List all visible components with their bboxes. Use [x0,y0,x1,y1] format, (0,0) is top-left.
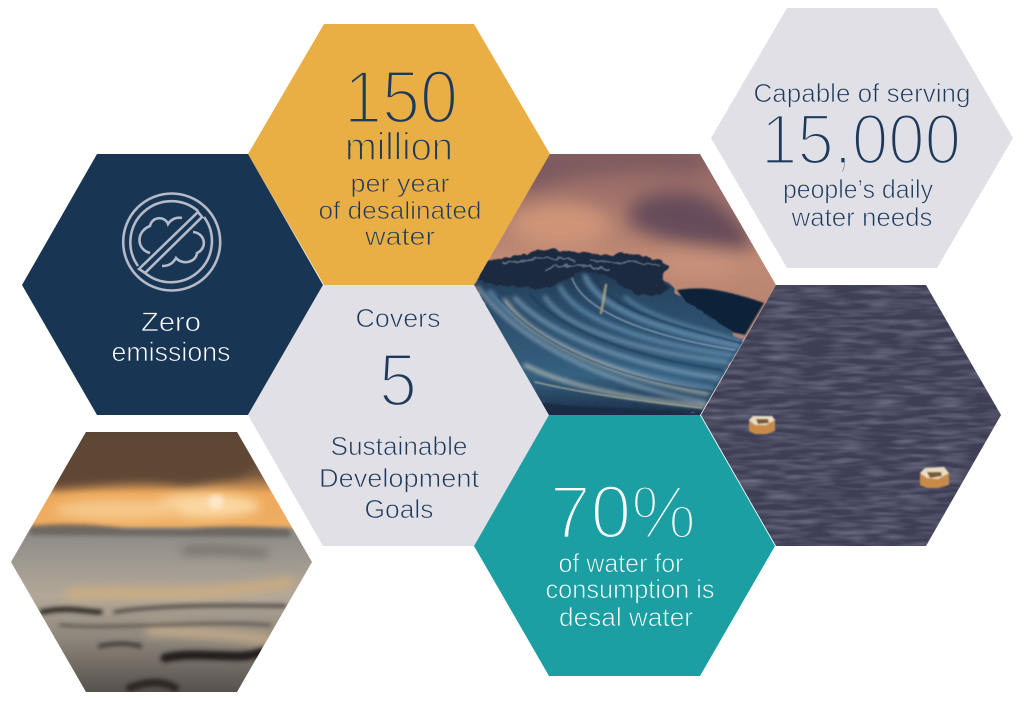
text: Sustainable Development Goals: Sustainable [330,431,468,461]
text: of water for consumption is desal water [546,548,714,632]
icon: floating pod left [749,416,775,434]
hexagon: capable of serving 15,000 people [711,8,1013,268]
text: per year of desalinated water: water [364,223,435,251]
hexagon: covers 5 sustainable development goals [248,285,549,546]
text: of water for consumption is desal water: of water for [558,548,684,578]
stat: 5: 5 [379,338,417,422]
photo hexagon: breaking ocean wave at dusk [470,150,780,420]
text: Zero emissions: Zero [141,307,201,337]
label: Covers: Covers [356,303,440,333]
photo hexagon: sea with floating desalination pods [700,285,1002,547]
text: Zero emissions: emissions [112,337,230,367]
hexagon: zero emissions [22,154,323,415]
stat: 15,000: 15,000 [761,101,961,180]
hexagon: 150 million per year of desalinated water [248,24,550,285]
label: Capable of serving: Capable of serving [754,78,970,108]
hexagon: 70% of water for consumption is desal water [474,415,775,676]
icon: crossed-out cloud [123,194,220,290]
text: Sustainable Development Goals: Goals [364,494,434,524]
text: Zero emissions [112,307,230,367]
text: Sustainable Development Goals [319,431,480,524]
stat: 70%: 70% [550,470,696,554]
stat: 150: 150 [344,55,458,139]
icon: floating pod right [920,467,949,488]
text: per year of desalinated water [318,170,482,251]
text: Sustainable Development Goals: Development [319,463,480,493]
text: of water for consumption is desal water: consumption is [546,574,714,604]
text: people's daily water needs [783,174,933,232]
text: people's daily water needs: water needs [791,202,932,232]
text: people's daily water needs: people’s daily [783,174,933,204]
text: per year of desalinated water: per year [350,170,450,198]
text: of water for consumption is desal water: desal water [559,602,693,632]
label: million: million [345,126,453,169]
text: per year of desalinated water: of desalinated [318,197,482,225]
photo hexagon: blurred sunset over water [11,432,312,692]
